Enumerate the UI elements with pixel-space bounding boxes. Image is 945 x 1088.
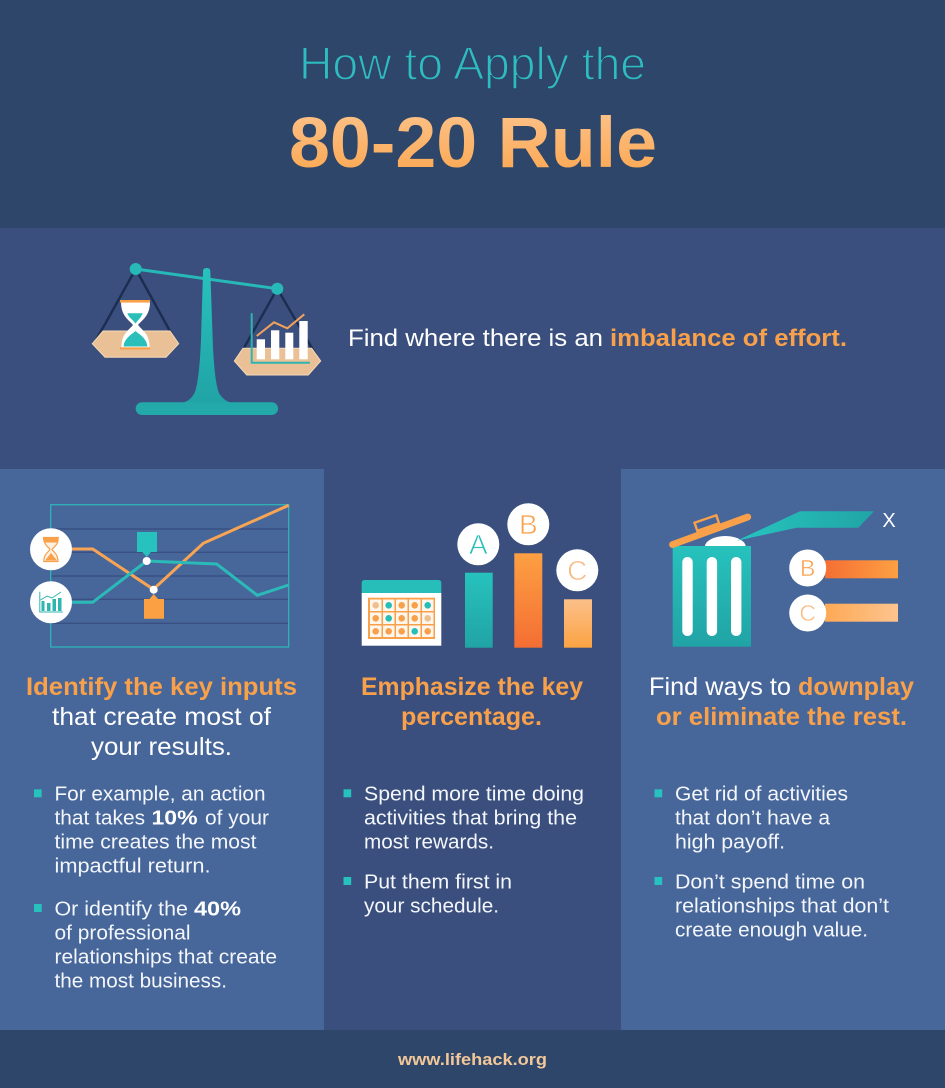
panel: identify key inputs (0, 469, 324, 1030)
heading (649, 673, 914, 731)
left strings (95, 269, 176, 342)
bullet: 10% action: 10% (152, 808, 198, 830)
bullet: 10% action: impactful return. (54, 856, 210, 878)
bullet: 40% relationships: of professional (54, 923, 190, 945)
bullet: 40% relationships: 40% (194, 899, 241, 921)
bullet: put them first: Put them first in (364, 872, 512, 894)
heading: or eliminate the rest. (656, 703, 907, 731)
icon: hourglass badge (30, 528, 72, 570)
heading: percentage. (401, 703, 542, 731)
heading (26, 673, 297, 761)
bar A (457, 523, 499, 648)
bullet: 40% relationships: the most business. (54, 971, 227, 993)
heading: your results. (91, 733, 232, 761)
footer url: www.lifehack.org (397, 1050, 547, 1069)
footer (0, 1030, 945, 1088)
base (136, 402, 278, 415)
bullet: spend more time: Spend more time doing (364, 784, 584, 806)
panel: downplay or eliminate (621, 469, 945, 1030)
marker: teal (137, 532, 157, 557)
icon: calendar (362, 580, 441, 646)
bullet: 40% relationships: relationships that create (54, 947, 277, 969)
bar B (507, 503, 549, 648)
icon: trash can (672, 511, 874, 647)
bar C: C (567, 555, 587, 586)
title line: 80-20 Rule: 80-20 Rule (289, 104, 657, 183)
bullet: don't spend time (654, 872, 889, 942)
line chart (51, 505, 289, 647)
bullet: 10% action: time creates the most (54, 832, 257, 854)
title line: How to Apply the: How to Apply the (299, 38, 646, 90)
bullet: 10% action: For example, an action (54, 784, 266, 806)
bullet: 40% relationships (34, 899, 277, 993)
bar B (789, 550, 898, 586)
beam (136, 269, 277, 289)
text: imbalance statement (348, 325, 847, 352)
bullet: get rid of activities (654, 784, 848, 854)
bar B: B (800, 555, 815, 581)
bullet: spend more time: most rewards. (364, 832, 494, 854)
bullet: don't spend time: create enough value. (675, 920, 868, 942)
bullet: spend more time: activities that bring the (364, 808, 577, 830)
icon: chart badge (30, 581, 72, 623)
mini bar chart (252, 313, 310, 363)
heading: Emphasize the key (361, 673, 583, 701)
bullet: get rid of activities: that don’t have a (675, 808, 831, 830)
heading: Find ways to (649, 673, 791, 701)
post (182, 268, 232, 403)
bullet: spend more time (344, 784, 584, 854)
heading: that create most of (52, 703, 271, 731)
left pan (92, 331, 179, 357)
right strings (238, 289, 318, 359)
bullet: don't spend time: relationships that don’t (675, 896, 889, 918)
bullet: don't spend time: Don’t spend time on (675, 872, 865, 894)
bar C (556, 549, 598, 648)
text: imbalance statement: imbalance of effort. (610, 325, 847, 352)
marker: orange (144, 594, 164, 619)
bar C (789, 594, 898, 632)
bullet: get rid of activities: Get rid of activities (675, 784, 848, 806)
icon: balance scale (92, 263, 321, 415)
hourglass (120, 300, 150, 350)
text: imbalance statement: Find where there is an (348, 325, 603, 352)
bullet: 10% action: of your (205, 808, 269, 830)
bullet: 10% action: that takes (54, 808, 145, 830)
bullet: get rid of activities: high payoff. (675, 832, 785, 854)
bullet: 40% relationships: Or identify the (54, 899, 188, 921)
bar C: C (799, 600, 816, 626)
bullet: put them first (344, 872, 512, 918)
right pan (234, 348, 321, 375)
heading: downplay (798, 673, 914, 701)
background: middle band (0, 228, 945, 1030)
heading: Identify the key inputs (26, 673, 297, 701)
bullet: put them first: your schedule. (364, 896, 499, 918)
heading (361, 673, 583, 731)
panel: emphasize key percentage (344, 503, 598, 918)
bullet: 10% action (34, 784, 269, 878)
header panel (0, 0, 945, 228)
X mark: X (882, 510, 896, 532)
bar B: B (519, 509, 538, 540)
bar A: A (469, 529, 488, 560)
